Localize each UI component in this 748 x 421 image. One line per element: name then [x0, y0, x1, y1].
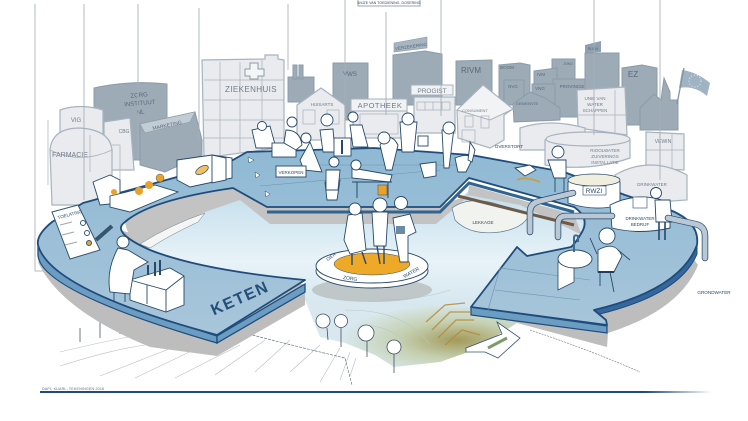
grondwater label: GRONDWATER — [697, 290, 731, 295]
toelating document — [52, 205, 112, 259]
building: Unie van Waterschappen: SCHAPPEN — [583, 108, 607, 113]
building: consument house: CONSUMENT — [462, 108, 488, 113]
sluice grate — [466, 322, 520, 358]
toilet — [455, 155, 472, 172]
building: Huisarts — [297, 88, 345, 140]
RWZI tank — [568, 174, 620, 208]
truck — [177, 155, 232, 187]
building: church — [640, 78, 678, 130]
platform shadow — [38, 230, 698, 356]
building: VIG: VIG — [71, 118, 81, 124]
toelating document: TOELATING — [57, 209, 83, 220]
building: Ziekenhuis: ZIEKENHUIS — [225, 85, 277, 94]
ring platform — [38, 148, 697, 343]
building: Apotheek — [351, 99, 407, 138]
building: Verzekering: VERZEKERING — [395, 42, 428, 51]
trees — [316, 314, 401, 373]
building: rioolwaterzuivering: RIOOLWATER — [590, 148, 620, 153]
top caption box — [357, 0, 421, 6]
building: Zorginstituut: ZORG — [130, 92, 148, 100]
building: Vewin: VEWIN — [655, 139, 672, 145]
building: Unie van Waterschappen: WATER — [587, 102, 604, 107]
three figures on the island — [344, 196, 416, 265]
buildings: Boom, Jong, IVM — [499, 59, 575, 100]
stream — [140, 213, 205, 248]
pond — [125, 185, 585, 320]
building: Huisarts: HUISARTS — [311, 102, 333, 107]
skyline: government and care institutions — [48, 37, 710, 205]
building: VIG — [60, 106, 103, 135]
river with polluted soil contours — [305, 290, 517, 367]
central island disc: DIER — [325, 251, 338, 262]
building: Progist — [411, 85, 455, 133]
building: Zorginstituut: INSTITUUT — [124, 100, 156, 108]
building: rioolwaterzuivering: INSTALLATIE — [591, 160, 619, 165]
building: Farmacie: FARMACIE — [52, 152, 88, 159]
buildings: NVG, Gemeente, VNG, Provincie: GEMEENTE — [516, 101, 539, 106]
factory conveyor with pills — [93, 174, 178, 212]
building: Marketing — [140, 112, 202, 172]
building: Rijk tower — [585, 41, 619, 100]
building: Unie van Waterschappen — [577, 87, 627, 135]
building: CBG — [104, 118, 134, 170]
platform surface details — [260, 165, 590, 310]
building: Progist: PROGIST — [417, 88, 447, 95]
building: Apotheek: APOTHEEK — [358, 101, 402, 110]
doctor and patient — [325, 157, 392, 200]
building: RIVM — [456, 60, 492, 105]
building: drinkwater — [615, 165, 687, 205]
engineer figure — [548, 146, 566, 192]
keten label: KETEN — [209, 279, 272, 319]
drinkwaterbedrijf tank with woman: DRINKWATER — [625, 216, 655, 221]
platform surface — [38, 148, 697, 335]
building: consument house — [457, 85, 513, 148]
building: VWS — [333, 63, 368, 120]
building: RIVM: RIVM — [461, 66, 481, 75]
credit: DAPI, KUARL, TEKENINGEN 2016 — [42, 387, 104, 391]
leakage blob — [452, 196, 574, 233]
tank — [520, 123, 585, 150]
drinkwaterbedrijf tank with woman: BEDRIJF — [631, 222, 649, 227]
building: rioolwaterzuivering — [545, 132, 630, 167]
central island disc: ZORG — [343, 275, 358, 283]
overstort label and drain: OVERSTORT — [495, 144, 523, 149]
landscape: fields and hedges — [60, 315, 640, 385]
buildings: Boom, Jong, IVM: JONG — [563, 62, 573, 66]
building: EZ — [622, 65, 657, 125]
base line — [40, 391, 712, 393]
EU flag — [677, 68, 710, 104]
building: EZ: EZ — [628, 70, 638, 79]
buildings: Boom, Jong, IVM: IVM — [537, 72, 545, 77]
building: rioolwaterzuivering: ZUIVERINGS — [591, 154, 619, 159]
leakage blob: LEKKAGE — [472, 220, 494, 225]
bucket — [420, 162, 436, 178]
platform thickness — [38, 245, 217, 343]
building: VWS: VWS — [343, 72, 357, 78]
buildings: NVG, Gemeente, VNG, Provincie: PROVINCIE — [560, 84, 584, 89]
verkopen sign: VERKOPEN — [278, 170, 304, 175]
vertical group lines — [35, 0, 660, 271]
top caption box: WIJZE VAN TOEDIENING, DOSERING — [357, 1, 421, 5]
verkopen sign — [276, 166, 306, 177]
sink and drinking man — [558, 228, 630, 292]
building: Ziekenhuis — [202, 55, 284, 158]
building: drinkwater: DRINKWATER — [637, 182, 668, 187]
building: Marketing: MARKETING — [152, 120, 182, 132]
building: Farmacie — [48, 120, 120, 205]
pipes — [530, 193, 705, 292]
building: Unie van Waterschappen: UNIE VAN — [585, 96, 605, 101]
central island disc: WATER — [402, 266, 421, 280]
buildings: Boom, Jong, IVM: BOOM — [500, 65, 514, 70]
building: factory chimneys — [288, 65, 314, 102]
RWZI tank: RWZI — [586, 188, 602, 195]
building: Rijk tower: RIJKM — [588, 47, 598, 51]
drinkwaterbedrijf tank with woman — [610, 188, 672, 240]
building: Zorginstituut — [94, 83, 167, 160]
central island disc — [312, 196, 432, 302]
back row people — [252, 112, 475, 178]
building: Zorginstituut: NL — [137, 110, 145, 116]
lab worker and bench — [109, 236, 184, 312]
building: Vewin — [646, 132, 684, 170]
overstort label and drain — [495, 144, 540, 182]
buildings: NVG, Gemeente, VNG, Provincie: VNG — [535, 86, 545, 91]
building: Verzekering — [393, 37, 442, 105]
building: CBG: CBG — [119, 129, 130, 135]
buildings: NVG, Gemeente, VNG, Provincie — [504, 79, 612, 122]
buildings: NVG, Gemeente, VNG, Provincie: NVG — [508, 84, 518, 89]
